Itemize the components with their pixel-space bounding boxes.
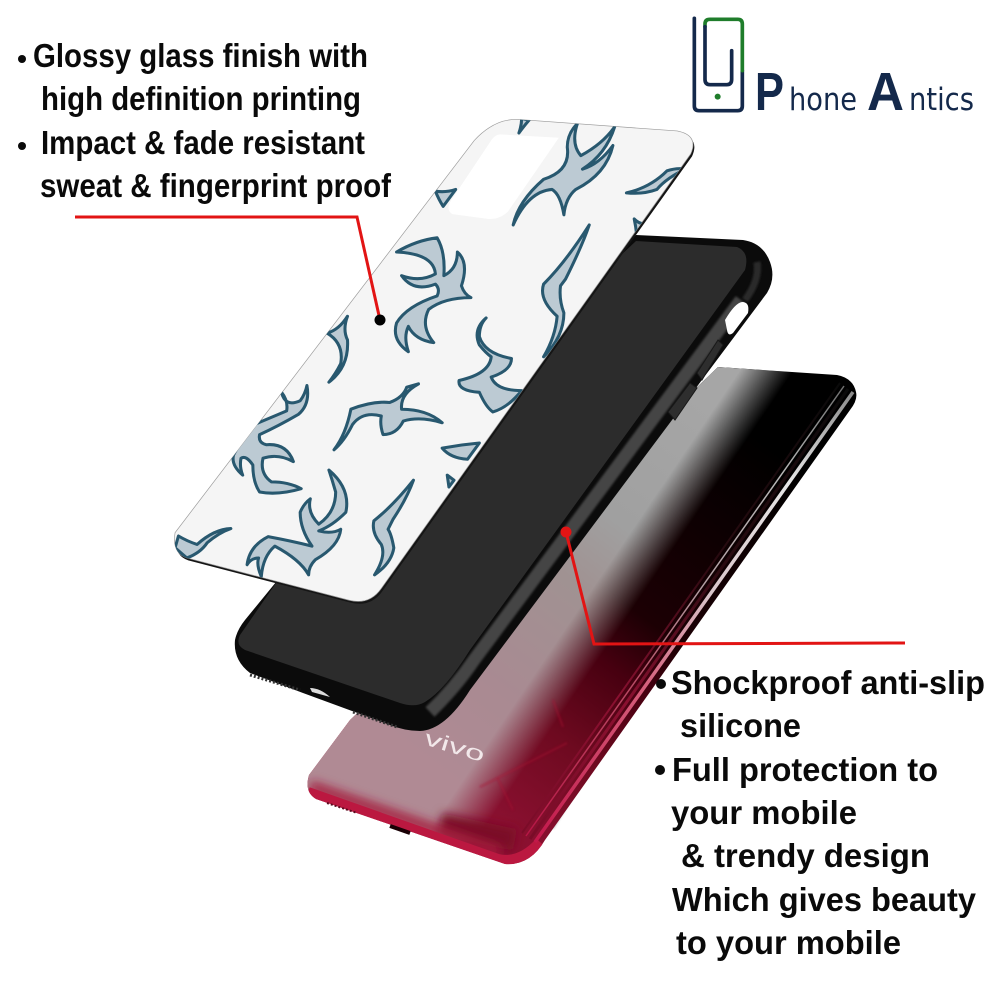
text block: glass features: sweat & fingerprint proof: [40, 167, 392, 204]
text block: glass features: Impact & fade resistant: [41, 124, 365, 161]
text block: glass features: [18, 37, 392, 204]
camera cutout on glass: [448, 134, 559, 219]
text block: silicone features: [655, 664, 985, 961]
brand mark: vivo: vivo: [422, 727, 488, 767]
icon: phone outline: [694, 18, 742, 111]
text block: silicone features: & trendy design: [681, 837, 930, 874]
phone: vivo handset behind case: [308, 367, 856, 864]
wordmark: ntics: [909, 82, 974, 118]
wordmark: [755, 62, 974, 122]
glass back panel with flame print: [174, 118, 694, 604]
text block: glass features: high definition printing: [41, 80, 361, 117]
text block: silicone features: Full protection to: [672, 751, 938, 788]
silicone case: [235, 235, 772, 731]
text block: silicone features: silicone: [680, 707, 801, 744]
logo: Phone Antics: [694, 18, 974, 122]
wordmark: A: [867, 62, 904, 122]
text block: silicone features: Which gives beauty: [672, 881, 977, 918]
volume buttons: [668, 340, 723, 420]
wordmark: P: [755, 62, 784, 122]
callout line: glass: [75, 217, 386, 326]
charging port: [310, 688, 330, 697]
wordmark: hone: [789, 82, 857, 118]
flame pattern: [175, 118, 686, 577]
text block: glass features: Glossy glass finish with: [33, 37, 368, 74]
callout line: silicone: [560, 526, 905, 644]
text block: silicone features: Shockproof anti-slip: [671, 664, 985, 701]
text block: silicone features: to your mobile: [676, 924, 901, 961]
text block: silicone features: your mobile: [671, 794, 857, 831]
camera cutout on case: [725, 302, 748, 334]
